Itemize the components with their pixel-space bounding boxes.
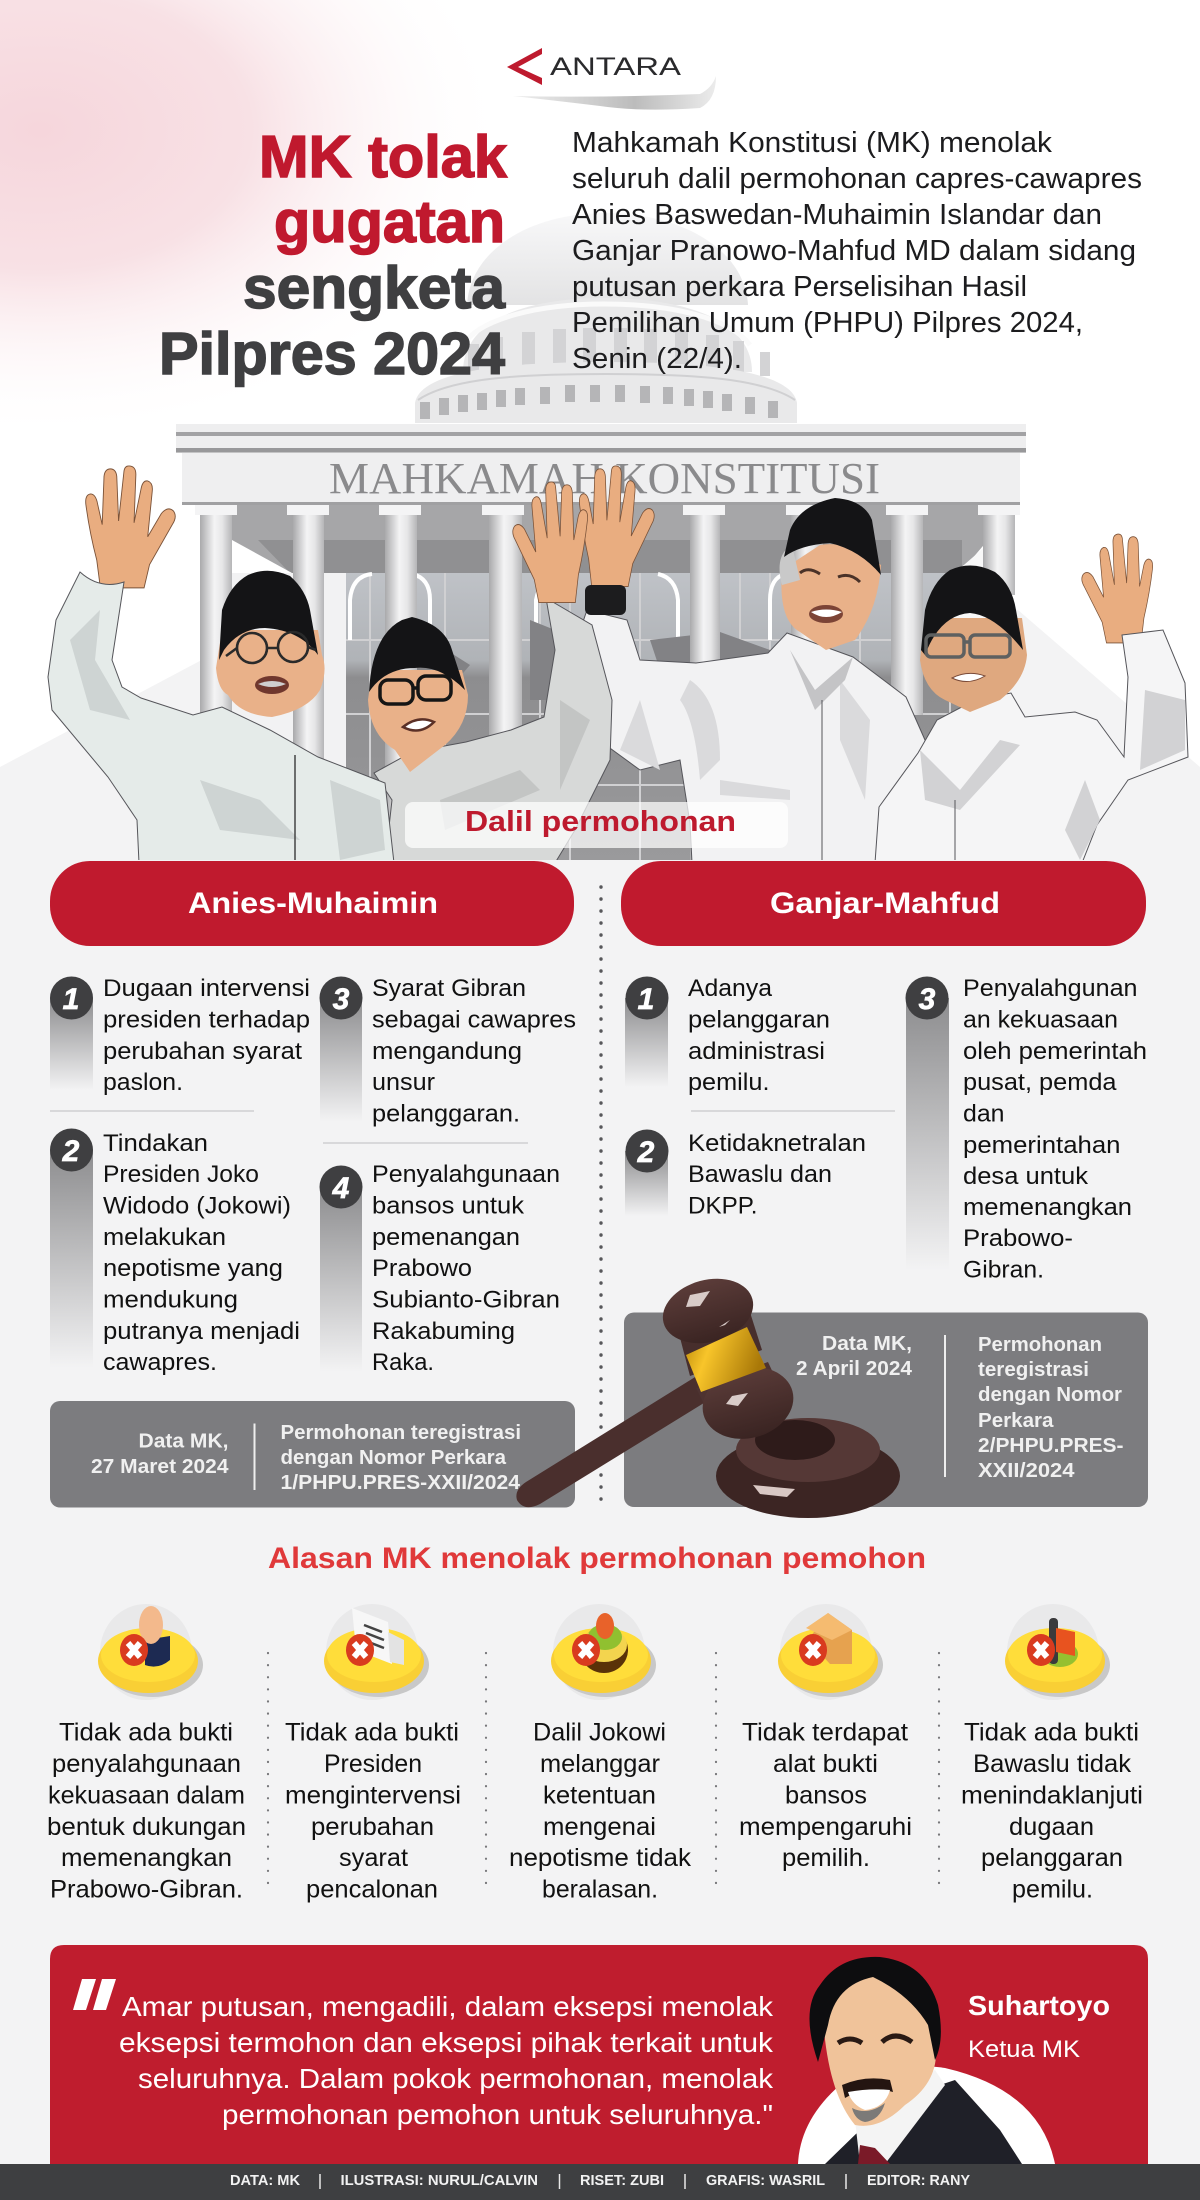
reason text: mengintervensi [285,1782,461,1810]
footer credits: RISET: ZUBI [580,2173,664,2189]
item 2 [625,1130,866,1220]
reason text: pemilih. [782,1844,870,1872]
reason text [47,1718,246,1904]
item 1: Dugaan intervensi [103,975,310,1002]
reason text: perubahan [311,1813,434,1841]
reason 1 [47,1604,246,1904]
hand [1082,534,1153,643]
item 3: an kekuasaan [963,1006,1118,1034]
reason text: dugaan [1009,1813,1094,1841]
intro paragraph: Ganjar Pranowo-Mahfud MD dalam sidang [572,235,1136,267]
reason text: kekuasaan dalam [48,1782,245,1810]
item 1: 1 [638,983,654,1016]
cap [921,565,1023,655]
dome [415,213,797,423]
reason 4 [739,1604,912,1872]
sleeve and body [570,610,925,863]
panel: Anies-Muhaimin arguments [50,975,576,1376]
item 3: 3 [919,983,936,1016]
intro paragraph: Senin (22/4). [572,343,742,375]
section heading: Dalil permohonan: Dalil permohonan [465,806,736,838]
pediment band and windows [232,505,988,863]
reason text: pencalonan [306,1876,438,1904]
item 4: bansos untuk [372,1192,525,1220]
item 3: oleh pemerintah [963,1038,1147,1065]
item 3: pemerintahan [963,1132,1120,1159]
item 3: Syarat Gibran [372,975,526,1002]
panel: Ganjar-Mahfud arguments [625,975,1147,1284]
reason text: memenangkan [61,1844,232,1872]
footer credits [0,2164,1200,2200]
pill: Ganjar-Mahfud [621,861,1146,946]
intro paragraph: putusan perkara Perselisihan Hasil [572,271,1027,303]
item 3: mengandung [372,1038,522,1065]
icon: documents rejected [324,1604,429,1700]
reason text: pemilu. [1012,1876,1093,1904]
intro paragraph [572,127,1142,375]
item 4: 4 [332,1172,350,1205]
reason text: penyalahgunaan [52,1750,241,1778]
item 3: pelanggaran. [372,1100,520,1128]
pill: Anies-Muhaimin: Anies-Muhaimin [188,887,438,920]
item 3: sebagai cawapres [372,1006,576,1034]
data box: Ganjar-Mahfud registration: 2/PHPU.PRES- [978,1435,1124,1457]
item 1: Adanya [688,975,772,1002]
reason text: mengenai [543,1813,656,1841]
item 2: Bawaslu dan [688,1161,832,1188]
face [368,670,468,772]
gavel handle [516,1374,712,1507]
title: sengketa [243,255,506,321]
heading: reasons: Alasan MK menolak permohonan pemohon [268,1542,926,1575]
item 3: unsur [372,1069,435,1096]
icon: quotation mark [73,1979,116,2010]
reason text: Tidak ada bukti [285,1718,459,1746]
reason text: syarat [339,1844,408,1872]
item 2: mendukung [103,1286,238,1314]
glasses [226,632,316,663]
logo: ANTARA: ANTARA [550,53,681,81]
glasses [380,676,451,704]
item 4: Raka. [372,1349,434,1376]
quote text: seluruhnya. Dalam pokok permohonan, menolak [138,2063,773,2094]
building: Mahkamah Konstitusi [176,213,1026,863]
item 2: nepotisme yang [103,1255,283,1282]
reason 5 [961,1604,1143,1904]
item 1: administrasi [688,1038,825,1065]
data box: Anies-Muhaimin registration: dengan Nomor Perkara [280,1447,507,1469]
section heading: Dalil permohonan [405,802,788,848]
item 4: Penyalahgunaan [372,1161,560,1188]
item 3: 3 [333,983,350,1016]
item 2: cawapres. [103,1349,217,1376]
icon: aid package rejected [778,1604,883,1700]
reason text: mempengaruhi [739,1813,912,1841]
reason text: Prabowo-Gibran. [50,1876,243,1904]
data box: Ganjar-Mahfud registration: dengan Nomor [978,1384,1122,1406]
item 2: 2 [62,1135,80,1168]
hand [513,482,588,603]
data box: Ganjar-Mahfud registration [624,1312,1148,1507]
illustration: Anies Baswedan [48,466,394,863]
item 1: paslon. [103,1069,183,1096]
reason 2 [285,1604,461,1904]
data box: Ganjar-Mahfud registration: Perkara [978,1410,1054,1432]
item 2 [50,1128,300,1376]
item 2: putranya menjadi [103,1318,300,1345]
footer credits: EDITOR: RANY [867,2173,970,2189]
entablature [176,424,1026,505]
reason text: alat bukti [773,1750,878,1778]
data box: Anies-Muhaimin registration: 27 Maret 2024 [91,1456,229,1478]
reason text: Tidak ada bukti [59,1718,233,1746]
item 4: Rakabuming [372,1318,515,1345]
item 1 [625,975,830,1096]
data box: Ganjar-Mahfud registration: teregistrasi [978,1359,1089,1381]
logo: ANTARA [507,48,716,110]
speaker name [968,1990,1110,2063]
quote text: Amar putusan, mengadili, dalam eksepsi menolak [122,1991,773,2022]
reason text: pelanggaran [981,1844,1123,1872]
gavel base [716,1418,900,1518]
body and raised sleeve [374,598,612,863]
reason text: Tidak terdapat [742,1718,908,1746]
reason text [739,1718,912,1872]
face [920,618,1027,712]
quote text [119,1991,773,2130]
item 3: Gibran. [963,1256,1044,1284]
item 2: Widodo (Jokowi) [103,1192,291,1220]
reason text: melanggar [540,1750,660,1778]
illustration: Muhaimin Iskandar [368,482,612,863]
intro paragraph: seluruh dalil permohonan capres-cawapres [572,163,1142,195]
data box: Ganjar-Mahfud registration: 2 April 2024 [796,1358,913,1380]
reason text [509,1718,692,1904]
item 4: Subianto-Gibran [372,1286,560,1314]
cap [219,571,318,660]
item 1: pemilu. [688,1069,770,1096]
item 4: pemenangan [372,1224,520,1251]
item 4: Prabowo [372,1255,472,1282]
item 1: pelanggaran [688,1006,830,1034]
item 2: DKPP. [688,1192,758,1220]
item 2: Tindakan [103,1130,208,1157]
cap [784,498,881,575]
reason text: nepotisme tidak [509,1844,692,1872]
item 1 [50,975,310,1096]
quote text: permohonan pemohon untuk seluruhnya." [222,2099,773,2130]
data box: Anies-Muhaimin registration: Data MK, [138,1430,228,1452]
icon: nepotism rejected [551,1604,656,1700]
data box: Ganjar-Mahfud registration: XXII/2024 [978,1460,1075,1482]
illustration: Mahfud MD [875,534,1188,863]
item 1: perubahan syarat [103,1038,302,1065]
cap [369,617,465,692]
footer credits: ILUSTRASI: NURUL/CALVIN [340,2173,538,2189]
reason text: Bawaslu tidak [973,1750,1132,1778]
data box: Anies-Muhaimin registration: Permohonan teregistrasi [280,1422,521,1444]
reason text [285,1718,461,1904]
reason text: bansos [785,1782,867,1810]
icon: person rejected [98,1604,203,1700]
icon: gavel [516,1269,900,1518]
hand [86,466,175,588]
pill: Anies-Muhaimin [50,861,574,946]
intro paragraph: Mahkamah Konstitusi (MK) menolak [572,127,1053,159]
face [216,630,325,717]
item 2: melakukan [103,1224,226,1251]
item 3: pusat, pemda [963,1069,1117,1096]
reason 3 [509,1604,692,1904]
dotted divider [599,887,603,1505]
reason text: Presiden [324,1750,422,1778]
reason text [961,1718,1143,1904]
lower background cover [0,860,1200,2200]
illustration: Ganjar Pranowo [570,466,925,863]
reason text: menindaklanjuti [961,1782,1143,1810]
item 3 [906,975,1147,1284]
columns [195,505,1020,863]
item 3: Prabowo- [963,1225,1073,1252]
item 2: Ketidaknetralan [688,1130,866,1157]
gavel head [656,1269,801,1449]
item 1: presiden terhadap [103,1006,310,1034]
data box: Anies-Muhaimin registration: 1/PHPU.PRES-XXII/2024 [280,1472,521,1494]
reason text: Tidak ada bukti [964,1718,1139,1746]
portrait: Suhartoyo [798,1957,1055,2164]
reason text: beralasan. [542,1876,658,1904]
item 4 [320,1161,560,1376]
watch [585,585,626,615]
panel: quote [50,1945,1148,2164]
data box: Ganjar-Mahfud registration: Permohonan [978,1334,1102,1356]
speaker name: Suhartoyo [968,1990,1110,2021]
title: gugatan [274,189,505,255]
title [159,124,507,387]
item 3: dan [963,1100,1004,1128]
quote text: eksepsi termohon dan eksepsi pihak terkait untuk [119,2027,773,2058]
icon: flag rejected [1005,1604,1110,1700]
intro paragraph: Anies Baswedan-Muhaimin Islandar dan [572,199,1102,231]
speaker name: Ketua MK [968,2036,1080,2063]
face [781,544,881,650]
hand [579,466,654,587]
data box: Anies-Muhaimin registration [50,1401,575,1508]
item 1: 1 [63,983,79,1016]
title: Pilpres 2024 [159,321,505,387]
item 3 [320,975,576,1128]
sleeve and body [48,572,394,863]
reason text: Dalil Jokowi [533,1718,666,1746]
data box: Ganjar-Mahfud registration: Data MK, [822,1333,912,1355]
reason text: bentuk dukungan [47,1813,246,1841]
reason text: ketentuan [543,1782,656,1810]
title: MK tolak [259,124,507,190]
intro paragraph: Pemilihan Umum (PHPU) Pilpres 2024, [572,307,1083,339]
pill: Ganjar-Mahfud: Ganjar-Mahfud [770,887,1000,920]
glasses [926,635,1010,657]
item 3: desa untuk [963,1163,1089,1190]
footer credits: GRAFIS: WASRIL [706,2173,825,2189]
footer credits: DATA: MK [230,2173,301,2189]
sleeve and body [875,630,1188,863]
item 2: Presiden Joko [103,1161,259,1188]
item 3: Penyalahgunan [963,975,1138,1002]
item 2: 2 [637,1136,655,1169]
building name: MAHKAMAH KONSTITUSI [329,454,880,503]
mouth [403,719,434,731]
item 3: memenangkan [963,1194,1132,1221]
